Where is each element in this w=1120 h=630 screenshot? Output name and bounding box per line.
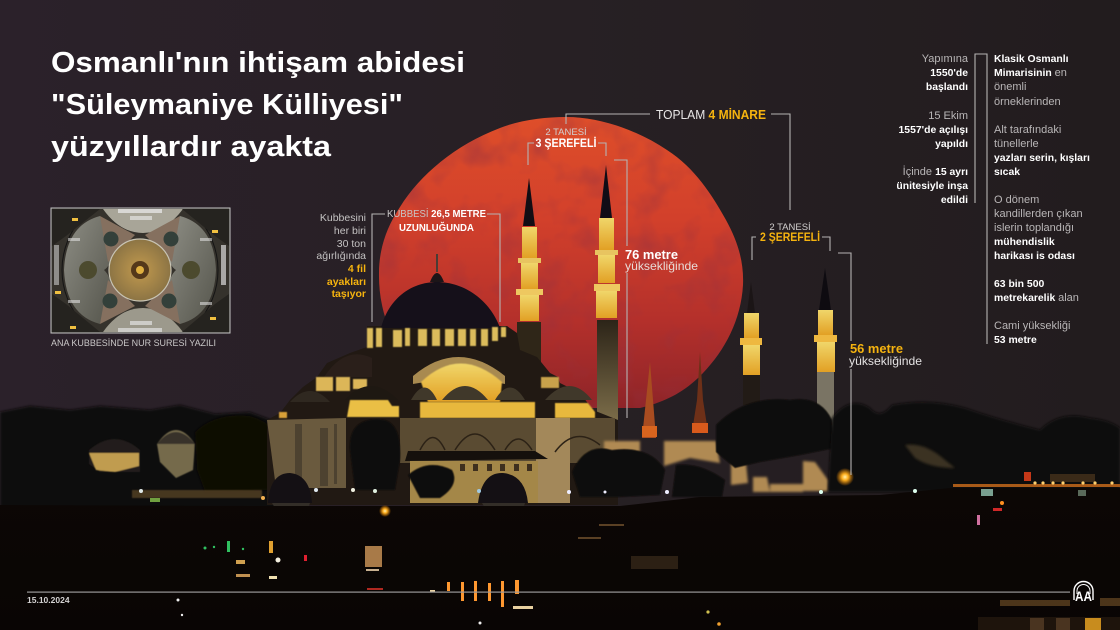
facts: construction dates: ünitesiyle inşa <box>896 181 968 192</box>
drum windows <box>367 327 506 348</box>
inset central dome <box>109 239 171 301</box>
facts: construction dates: Yapımına <box>922 53 969 65</box>
dome label: elephant feet: 4 fil <box>348 263 366 275</box>
lower domes with arcaded bases <box>268 473 528 520</box>
bracket: 2 balconies <box>752 237 830 260</box>
inset caption: ANA KUBBESİNDE NUR SURESİ YAZILI <box>51 338 216 349</box>
facts: architecture: tünellerle <box>994 138 1039 150</box>
minaret 3 (56 metres) <box>740 282 762 405</box>
foreground ground <box>0 488 1120 630</box>
label 76 metres: yüksekliğinde <box>625 259 698 273</box>
tree line left <box>0 405 290 510</box>
facts: construction dates: edildi <box>941 195 968 206</box>
title: "Süleymaniye Külliyesi" <box>51 89 403 121</box>
total minarets bracket <box>566 114 790 210</box>
facts: architecture <box>994 54 1090 346</box>
label 56 metres: yüksekliğinde <box>849 354 922 368</box>
dome label: elephant feet: 30 ton <box>337 238 366 250</box>
dome label: 26,5 metre <box>387 207 486 234</box>
minaret 1 (three balconies) <box>516 178 543 362</box>
minaret 4 (56 metres) <box>814 268 837 434</box>
label: 2 minarets 2 balconies: 2 ŞEREFELİ <box>760 229 820 244</box>
title: yüzyıllardır ayakta <box>51 131 332 163</box>
facts: architecture: örneklerinden <box>994 96 1061 108</box>
dome annotation bracket <box>372 214 500 322</box>
mosque building <box>267 254 618 505</box>
main dome <box>381 254 500 328</box>
left wing wall <box>267 418 346 488</box>
facts: architecture: islerin toplandığı <box>994 222 1074 234</box>
inset roundels <box>102 232 178 308</box>
facts: architecture: mühendislik <box>994 237 1055 248</box>
inset lower half dome <box>103 308 183 332</box>
dome label: elephant feet: Kubbesini <box>320 212 366 224</box>
city lights <box>139 488 1120 630</box>
inset windows <box>54 209 226 332</box>
lit bar left <box>347 400 399 417</box>
inset photo: dome interior <box>50 208 230 334</box>
arches <box>420 434 600 452</box>
total minarets label: TOPLAM 4 MİNARE <box>656 107 766 122</box>
facts: architecture: Mimarisinin en <box>994 67 1067 79</box>
portico lit facade <box>410 461 538 503</box>
tree by side building <box>195 415 282 492</box>
facts: architecture: harikası is odası <box>994 251 1075 262</box>
Anadolu Agency logo: AA <box>1075 588 1092 604</box>
portico roof <box>405 451 548 461</box>
small light strip left <box>279 412 287 418</box>
red full moon <box>375 110 750 410</box>
small domes <box>290 386 592 402</box>
facts: architecture: Alt tarafındaki <box>994 124 1061 136</box>
facts: architecture: Cami yüksekliği <box>994 320 1070 332</box>
minaret 2 (tall, 76 metres) <box>594 165 620 440</box>
facts: architecture: Klasik Osmanlı <box>994 54 1069 65</box>
label: 2 minarets 2 balconies: 2 TANESİ <box>769 222 811 233</box>
facts: construction dates: 15 Ekim <box>928 110 968 122</box>
tree line right <box>828 402 1120 492</box>
dome label: elephant feet: ayakları <box>327 276 366 288</box>
title <box>51 47 465 163</box>
facts: architecture: sıcak <box>994 167 1020 178</box>
facts: architecture: 53 metre <box>994 335 1037 346</box>
lit bar central <box>420 402 535 418</box>
label: 2 minarets 3 balconies <box>536 127 596 150</box>
lit bar right <box>555 403 595 418</box>
side window row left <box>316 377 367 391</box>
trees right of mosque <box>572 399 835 497</box>
right column bracket <box>975 54 987 344</box>
small orange minaret 1 <box>642 362 657 438</box>
Anadolu Agency logo <box>1074 582 1093 604</box>
low lit row left <box>132 490 262 498</box>
facts: architecture: kandillerden çıkan <box>994 208 1083 220</box>
left wing panels <box>295 424 337 486</box>
far shore strip lights <box>953 472 1120 496</box>
inset side oculi <box>79 261 97 279</box>
facts: architecture: önemli <box>994 81 1026 93</box>
height bracket 56 metres <box>838 253 851 475</box>
facts: construction dates: İçinde 15 ayrı <box>903 165 968 178</box>
side building left <box>89 430 195 478</box>
label: 2 minarets 3 balconies: 2 TANESİ <box>545 127 587 138</box>
central wall <box>400 418 615 463</box>
date: 15.10.2024 <box>27 595 70 605</box>
height bracket 76 metres <box>614 160 627 418</box>
inset outer ring <box>62 228 218 313</box>
dome label: elephant feet: her biri <box>334 225 366 237</box>
side window row right <box>541 377 559 388</box>
dome label: 26,5 metre: KUBBESİ 26,5 METRE <box>387 207 486 220</box>
street lamp glow <box>836 468 854 486</box>
facts: construction dates: 1550'de <box>930 68 968 79</box>
label: 2 minarets 2 balconies <box>760 222 820 244</box>
label 76 metres <box>625 248 698 273</box>
inset pendentives <box>100 216 180 324</box>
small orange minaret 2 <box>692 352 708 433</box>
inset corners <box>52 209 229 332</box>
facts: architecture: 63 bin 500 <box>994 279 1044 290</box>
facts: architecture: metrekarelik alan <box>994 292 1079 304</box>
inset right half dome <box>169 216 216 324</box>
dome label: elephant feet: taşıyor <box>332 288 366 300</box>
trees before mosque <box>350 419 454 498</box>
facts: architecture: yazları serin, kışları <box>994 153 1090 164</box>
title: Osmanlı'nın ihtişam abidesi <box>51 47 465 79</box>
inset left half dome <box>64 216 111 324</box>
dome label: 26,5 metre: UZUNLUĞUNDA <box>399 221 474 234</box>
label 56 metres <box>849 342 922 368</box>
facts: construction dates <box>896 53 969 206</box>
central arch tympanum <box>413 357 505 402</box>
label 76 metres: 76 metre <box>625 248 678 262</box>
right bright pier <box>536 418 570 503</box>
facts: architecture: O dönem <box>994 194 1039 206</box>
facts: construction dates: başlandı <box>926 82 968 93</box>
portico windows <box>425 464 532 492</box>
label: 2 minarets 3 balconies: 3 ŞEREFELİ <box>536 135 596 150</box>
side half dome left <box>324 354 372 377</box>
dome label: elephant feet <box>316 212 366 300</box>
timeline rule <box>27 592 1070 593</box>
inset upper half dome <box>103 209 183 233</box>
dome label: elephant feet: ağırlığında <box>316 250 366 262</box>
inset lights <box>55 218 218 329</box>
mosque body silhouette <box>267 326 618 505</box>
facts: construction dates: yapıldı <box>935 139 968 150</box>
lit buildings right of mosque <box>604 441 828 492</box>
facts: construction dates: 1557'de açılışı <box>899 125 968 136</box>
bracket: 3 balconies <box>528 143 606 165</box>
tree highlights right <box>905 445 955 468</box>
label 56 metres: 56 metre <box>850 342 903 356</box>
